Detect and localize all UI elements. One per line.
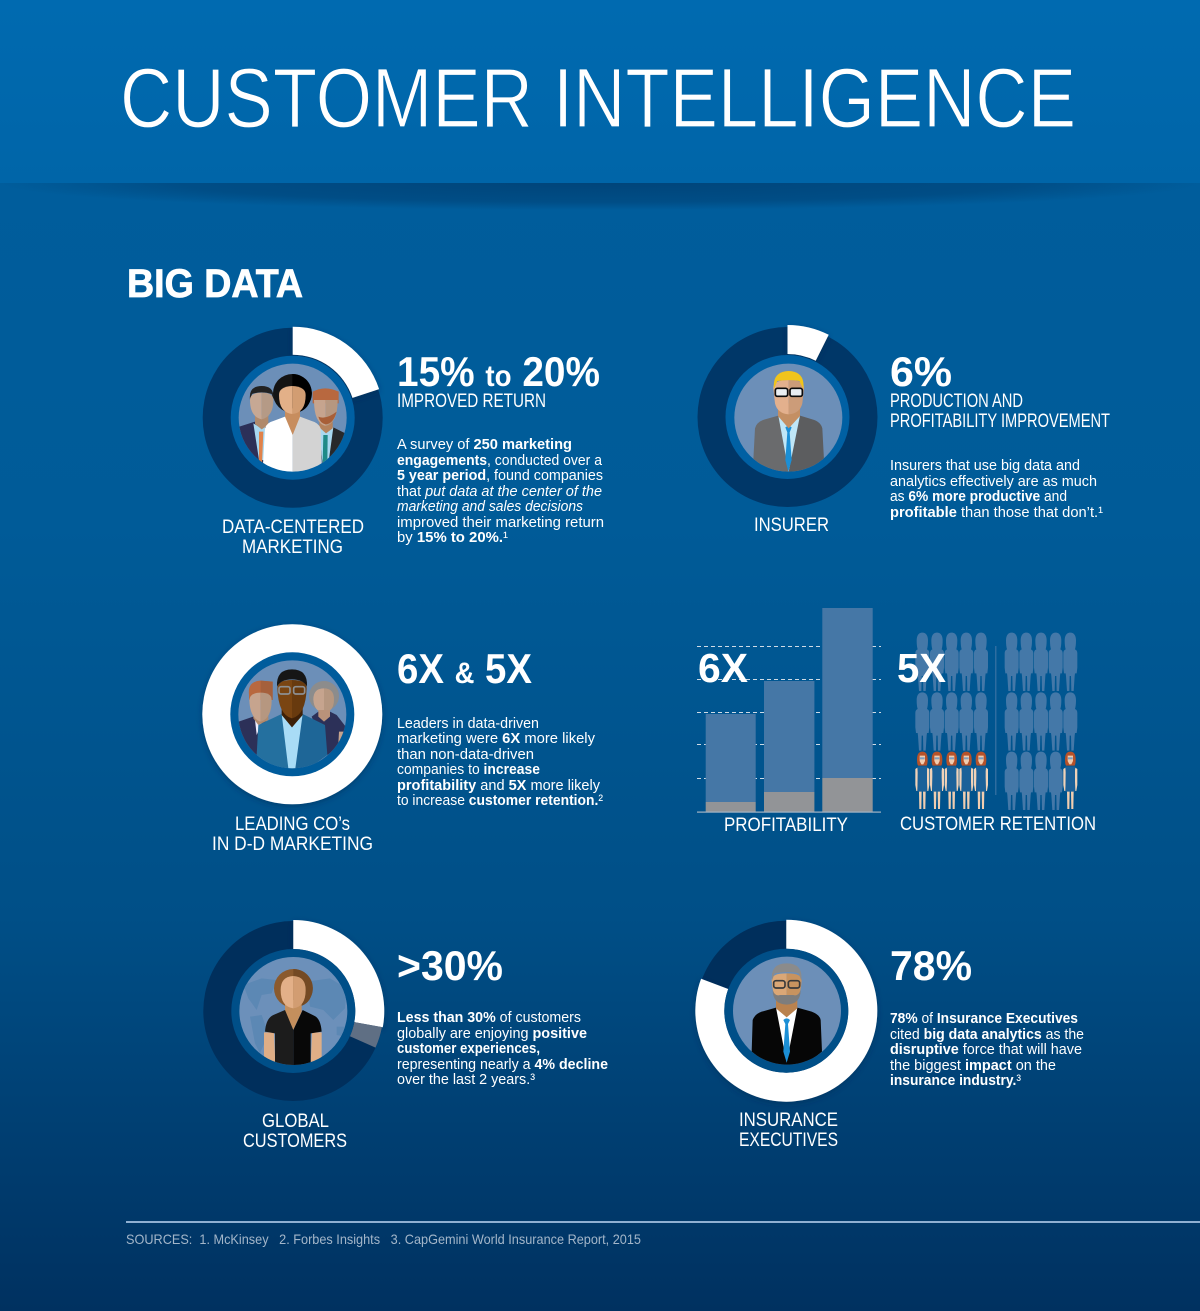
- label: [243, 1111, 347, 1152]
- title: CUSTOMER INTELLIGENCE: [120, 51, 1076, 145]
- statistic: 6X & 5X: [397, 645, 532, 692]
- chart: customer retention pictogram: [915, 633, 1077, 810]
- donut: 78%: [695, 920, 877, 1102]
- icon: three colleagues: [239, 364, 347, 477]
- text block: [397, 1009, 608, 1088]
- text block: improved their marketing return: [397, 514, 604, 531]
- text block: A survey of 250 marketing: [397, 436, 572, 453]
- text block: Leaders in data-driven: [397, 715, 539, 732]
- text block: marketing were 6X more likely: [397, 730, 595, 747]
- text block: engagements, conducted over a: [397, 452, 603, 469]
- label: MARKETING: [242, 537, 343, 558]
- donut: 6%: [698, 325, 878, 507]
- text block: Less than 30% of customers: [397, 1009, 581, 1026]
- text block: [890, 457, 1103, 521]
- label: [739, 1110, 838, 1151]
- text block: [397, 715, 603, 809]
- label: INSURER: [754, 515, 829, 536]
- text block: profitable than those that don’t.¹: [890, 504, 1103, 521]
- statistic: 6X: 6X: [698, 645, 748, 691]
- text block: [397, 436, 604, 546]
- text block: than non-data-driven: [397, 746, 534, 763]
- text block: that put data at the center of the: [397, 483, 602, 500]
- text block: companies to increase: [397, 761, 540, 778]
- panel: leading companies: [202, 624, 603, 855]
- label: EXECUTIVES: [739, 1130, 838, 1151]
- label: INSURANCE: [739, 1110, 838, 1131]
- panel: data-centered marketing: [203, 327, 604, 558]
- label: GLOBAL: [262, 1111, 329, 1132]
- label: [222, 517, 364, 558]
- subheading: [890, 391, 1110, 432]
- chart label: PROFITABILITY: [724, 815, 848, 836]
- text block: cited big data analytics as the: [890, 1026, 1084, 1043]
- text block: 78% of Insurance Executives: [890, 1010, 1078, 1027]
- label: CUSTOMERS: [243, 1131, 347, 1152]
- subheading: PROFITABILITY IMPROVEMENT: [890, 411, 1110, 432]
- heading: big data: BIG DATA: [127, 262, 303, 306]
- text block: over the last 2 years.³: [397, 1071, 535, 1088]
- icon: executive: [733, 957, 841, 1067]
- text block: to increase customer retention.²: [397, 792, 603, 809]
- panel: insurer: [698, 325, 1110, 536]
- text block: analytics effectively are as much: [890, 473, 1097, 490]
- statistic: 15% to 20%: [397, 348, 600, 395]
- text block: representing nearly a 4% decline: [397, 1056, 608, 1073]
- label: LEADING CO’s: [235, 814, 350, 835]
- text block: marketing and sales decisions: [397, 498, 583, 515]
- text block: 5 year period, found companies: [397, 467, 603, 484]
- label: DATA-CENTERED: [222, 517, 364, 538]
- text block: the biggest impact on the: [890, 1057, 1056, 1074]
- statistic: 5X: 5X: [897, 645, 946, 691]
- icon: woman over world map: [239, 957, 347, 1067]
- text block: Insurers that use big data and: [890, 457, 1080, 474]
- sources: SOURCES: 1. McKinsey 2. Forbes Insights 3. CapGemini World Insurance Report, 2015: [126, 1231, 641, 1247]
- text block: disruptive force that will have: [890, 1041, 1082, 1058]
- chart label: CUSTOMER RETENTION: [900, 814, 1096, 835]
- donut: 15% to 20%: [203, 327, 383, 508]
- text block: profitability and 5X more likely: [397, 777, 600, 794]
- text block: customer experiences,: [397, 1040, 540, 1057]
- panel: insurance executives: [695, 920, 1084, 1151]
- icon: insurer: [734, 364, 842, 473]
- text block: as 6% more productive and: [890, 488, 1067, 505]
- text block: globally are enjoying positive: [397, 1025, 587, 1042]
- subheading: IMPROVED RETURN: [397, 391, 546, 412]
- panel: global customers: [203, 920, 608, 1152]
- text block: [890, 1010, 1084, 1089]
- label: IN D-D MARKETING: [212, 834, 373, 855]
- donut: full ring: [202, 624, 382, 804]
- text block: by 15% to 20%.¹: [397, 529, 508, 546]
- donut: >30%: [203, 920, 384, 1101]
- statistic: >30%: [397, 942, 503, 989]
- text block: insurance industry.³: [890, 1072, 1021, 1089]
- header band: [0, 0, 1200, 183]
- chart: profitability bars: [697, 608, 881, 813]
- label: [212, 814, 373, 855]
- icon: three leaders: [238, 660, 346, 770]
- statistic: 78%: [890, 942, 972, 989]
- header shadow: [0, 183, 1200, 213]
- statistic: 6%: [890, 348, 952, 395]
- subheading: PRODUCTION AND: [890, 391, 1023, 412]
